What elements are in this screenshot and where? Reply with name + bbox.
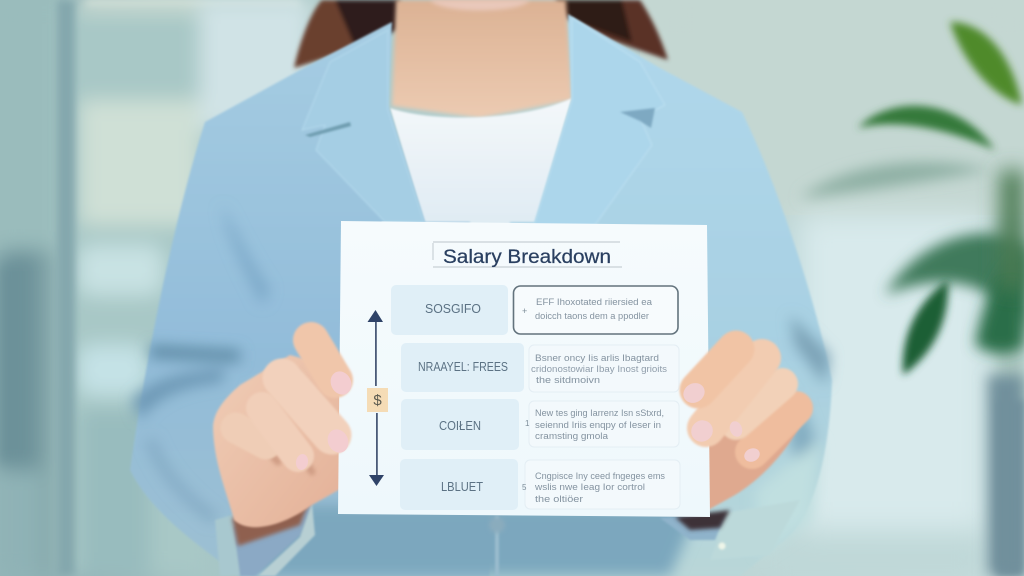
sleeve folds	[132, 205, 830, 555]
lapel notches	[305, 108, 655, 137]
ring finger	[736, 384, 782, 424]
background wall and column	[640, 0, 1024, 576]
row 4: 5	[522, 483, 527, 492]
row 1	[391, 285, 678, 335]
index finger	[311, 340, 335, 380]
chin	[430, 0, 530, 10]
row 4: LBLUET	[441, 480, 483, 494]
left hand fingers	[236, 340, 355, 472]
row 2: Bsner oncy Iis arlis Ibagtard	[535, 353, 659, 363]
white shirt	[390, 98, 572, 226]
finger shadows	[243, 372, 338, 472]
jacket button	[489, 517, 505, 533]
row 4: wslis nwe Ieag Ior cortrol	[534, 482, 645, 492]
row 2: cridonostowiar Ibay Inost grioits	[531, 364, 668, 374]
middle finger	[706, 358, 762, 428]
little finger	[752, 408, 796, 452]
left hand palm behind paper	[213, 355, 345, 527]
neck	[392, 0, 572, 118]
plant pot	[988, 375, 1024, 576]
row 3: seiennd Iriis enqpy of Ieser in	[535, 420, 661, 430]
plant leaves	[800, 22, 1024, 375]
jacket lower front	[255, 505, 700, 576]
right hand palm behind paper	[700, 415, 805, 510]
dark wrist shadows	[232, 500, 730, 546]
woman	[130, 0, 832, 576]
fingernails	[295, 368, 355, 471]
row 4	[400, 459, 680, 510]
row 1: +	[522, 306, 527, 316]
jacket right side	[490, 14, 832, 576]
row 3: New tes ging Iarrenz Isn sStxrd,	[535, 408, 664, 418]
vertical salary arrow	[367, 310, 388, 486]
row 2	[401, 343, 679, 392]
row 2: the sitdmoivn	[536, 375, 600, 385]
heading: Salary Breakdown	[443, 246, 611, 268]
lapel left	[302, 30, 424, 222]
jacket left side	[130, 22, 490, 576]
row 1: EFF Ihoxotated riiersied ea	[536, 297, 652, 307]
ring finger	[262, 408, 298, 456]
left cuff	[215, 503, 315, 576]
middle finger	[282, 378, 332, 435]
row 1: doicch taons dem a ppodler	[535, 311, 649, 321]
row 3	[401, 399, 679, 450]
row 3: COIŁEN	[439, 418, 481, 433]
jacket placket	[495, 516, 499, 576]
vertical salary arrow: $	[373, 392, 382, 409]
hair	[294, 0, 668, 68]
row 4: Cngpisce Iny ceed fngeges ems	[535, 471, 666, 481]
plant	[800, 22, 1024, 576]
lapel right	[534, 18, 665, 225]
row 3: cramsting gmola	[535, 431, 608, 441]
right cuff	[660, 500, 800, 560]
paper sheet	[338, 221, 710, 517]
index finger	[698, 349, 736, 390]
row 2: NRAAYEL: FREES	[418, 360, 508, 374]
fingernails	[680, 379, 762, 464]
right hand fingers	[680, 349, 796, 464]
little finger	[236, 428, 266, 444]
row 1: SOSGIFO	[425, 301, 481, 316]
paper card	[338, 221, 710, 517]
row 4: the oltiöer	[535, 494, 583, 504]
row 3: 1	[525, 419, 530, 428]
